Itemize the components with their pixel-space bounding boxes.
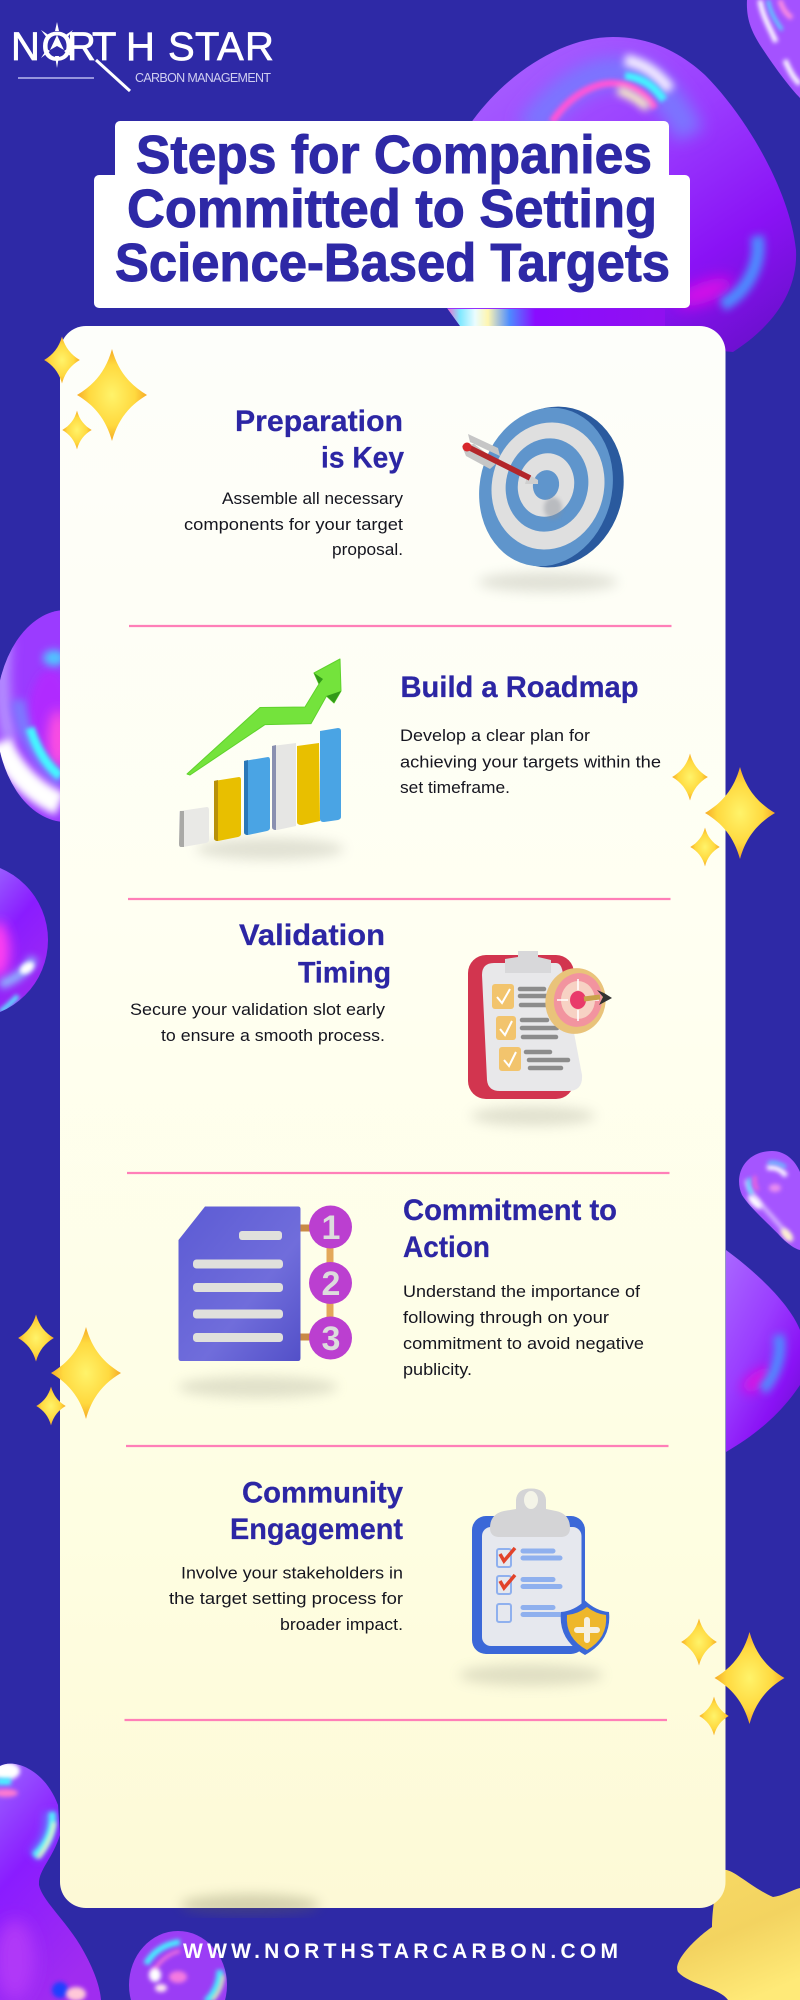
icon: blue clipboard with shield [459, 1488, 609, 1686]
step 4: icon numbered document: 2 [322, 1265, 340, 1303]
step 5: text: Involve your stakeholders in [181, 1564, 403, 1582]
star: bottom right [677, 1870, 800, 2000]
title [94, 121, 690, 308]
icon: checklist with target [468, 951, 612, 1126]
step 1: text: Preparation [235, 405, 403, 438]
blob: right large [726, 1250, 800, 1452]
step 4: text: following through on your [403, 1308, 609, 1327]
step 1: text: proposal. [332, 540, 403, 559]
blob: bottom small [129, 1931, 227, 2000]
sparkles: top left [44, 337, 147, 449]
blob: left lower [0, 868, 48, 1012]
step 1: text [184, 405, 404, 559]
sparkles: right upper [672, 754, 775, 866]
logo: CARBON MANAGEMENT [135, 71, 271, 85]
step 3: text [130, 919, 391, 1045]
step 2: text: set timeframe. [400, 778, 510, 797]
sparkles: right lower [681, 1619, 784, 1735]
step 2: text: achieving your targets within the [400, 752, 661, 772]
title: Committed to Setting [127, 179, 657, 239]
divider lines [124, 626, 672, 1720]
step 4: text: publicity. [403, 1360, 472, 1379]
step 1: text: is Key [321, 442, 404, 474]
step 5: text [169, 1476, 403, 1634]
blob: left upper [0, 610, 60, 822]
step 4: text: Commitment to [403, 1194, 617, 1227]
sparkles: left lower [18, 1315, 121, 1425]
blob: right small [739, 1151, 800, 1250]
step 4: icon numbered document [178, 1206, 352, 1398]
footer url: WWW.NORTHSTARCARBON.COM [183, 1940, 618, 1963]
panel: main card [60, 326, 726, 1908]
title: Steps for Companies [136, 125, 652, 185]
step 1: text: Assemble all necessary [222, 489, 404, 508]
step 4: icon numbered document: 1 [322, 1209, 340, 1247]
step 3: text: Secure your validation slot early [130, 1000, 386, 1019]
step 2: icon bar chart with arrow [179, 659, 344, 860]
blob: bottom left [0, 1755, 105, 2000]
step 3: text: Validation [239, 919, 385, 952]
step 5: text: the target setting process for [169, 1589, 403, 1608]
blob: top right corner [746, 0, 800, 98]
step 4: text: commitment to avoid negative [403, 1334, 644, 1353]
step 5: text: broader impact. [280, 1615, 403, 1634]
icon: target with arrow [462, 391, 641, 592]
step 2: text [400, 671, 661, 797]
blob: large top right [430, 30, 800, 360]
step 2: text: Build a Roadmap [400, 671, 638, 704]
step 5: text: Community [242, 1476, 403, 1510]
step 4: icon numbered document: 3 [322, 1320, 340, 1358]
step 3: text: Timing [298, 956, 391, 990]
step 1: text: components for your target [184, 515, 403, 534]
logo: NORTH STAR [11, 25, 274, 69]
step 4: text: Action [403, 1231, 490, 1264]
step 3: text: to ensure a smooth process. [161, 1026, 385, 1045]
step 2: text: Develop a clear plan for [400, 726, 590, 745]
shadow at panel bottom [180, 1894, 320, 1916]
logo [11, 22, 274, 91]
step 4: text: Understand the importance of [403, 1282, 640, 1301]
step 4: text [403, 1194, 644, 1379]
title: Science-Based Targets [115, 233, 670, 293]
step 5: text: Engagement [230, 1513, 403, 1546]
